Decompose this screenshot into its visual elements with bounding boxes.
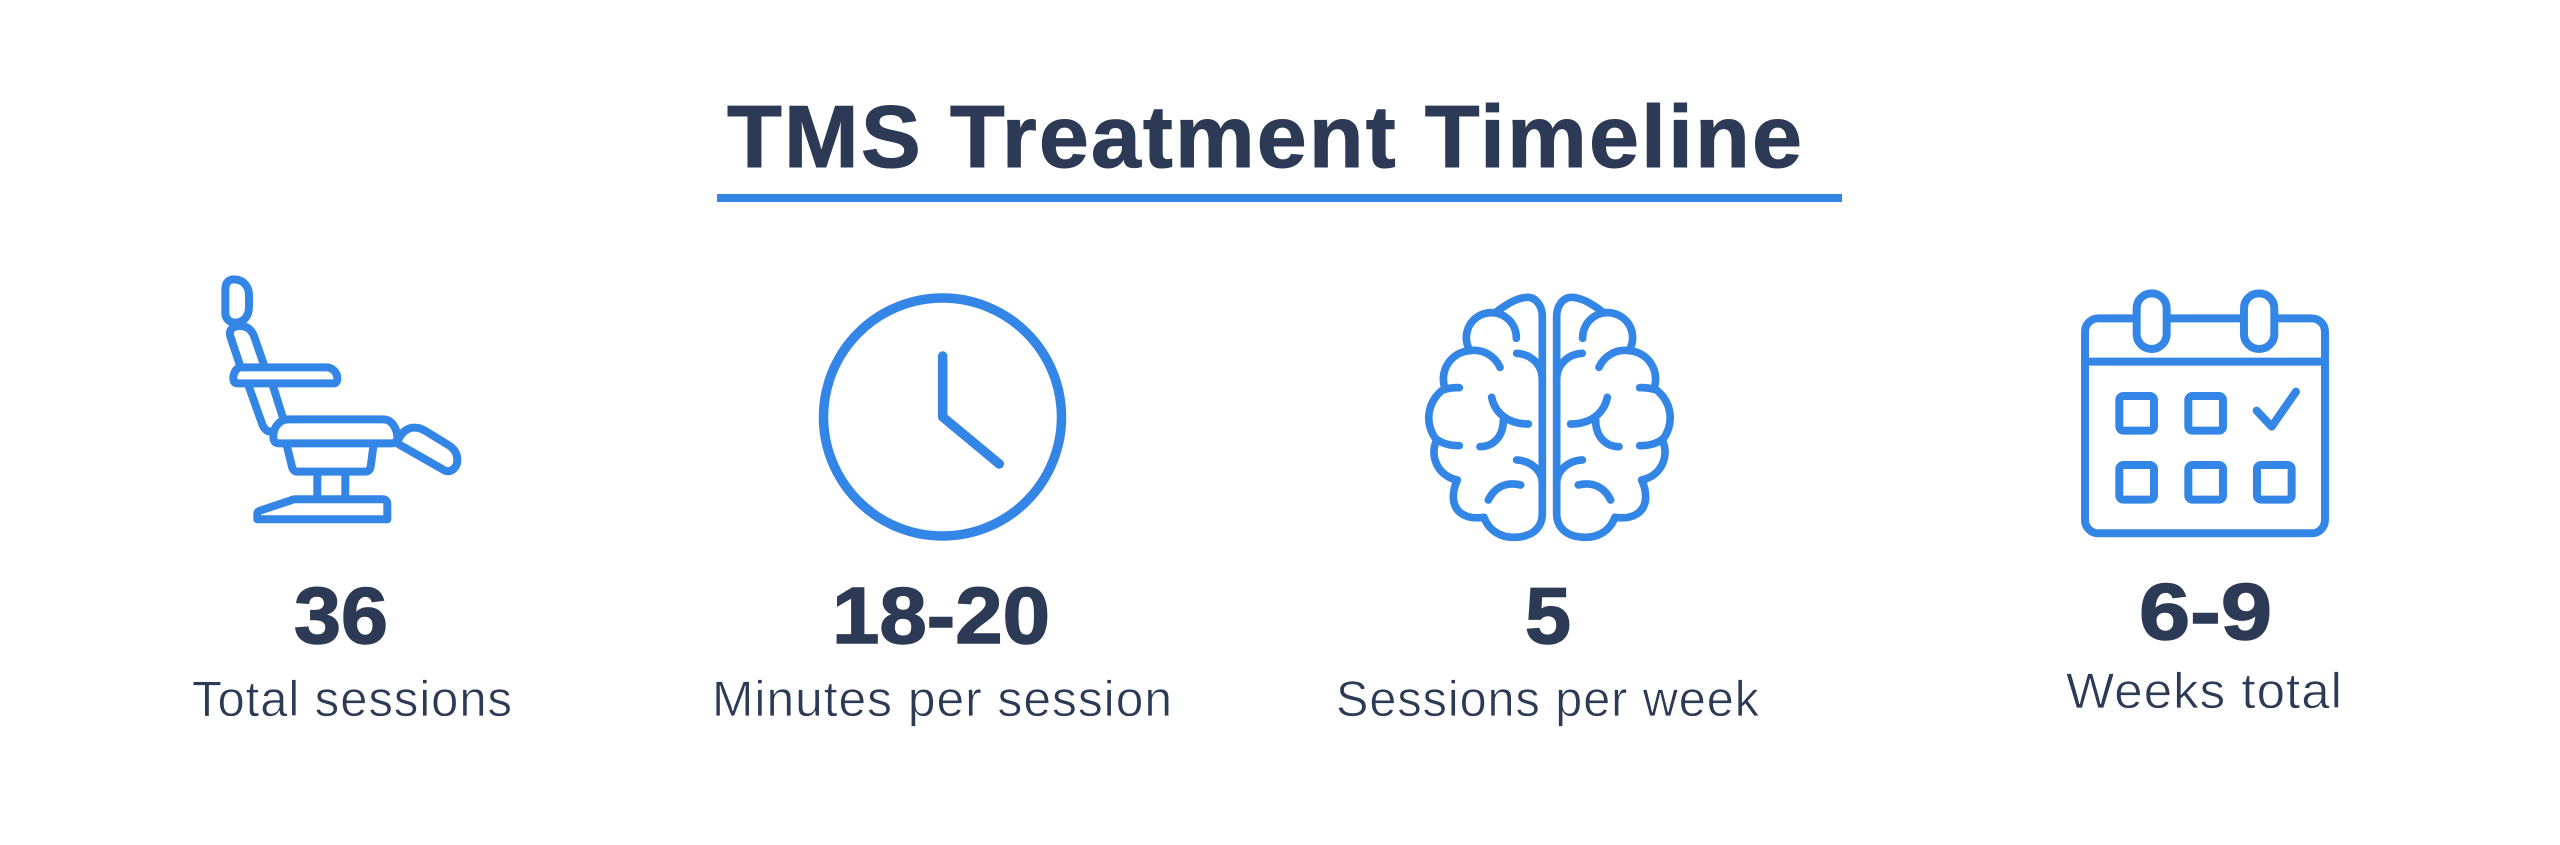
number: 5: 5 xyxy=(1525,571,1571,660)
panel: weeks total xyxy=(2066,293,2343,719)
panel: minutes per session xyxy=(712,298,1173,727)
number: 36: 36 xyxy=(294,571,388,660)
title: TMS Treatment Timeline xyxy=(727,87,1804,186)
label: weeks total: Weeks total xyxy=(2066,663,2343,719)
number: 6-9: 6-9 xyxy=(2139,567,2272,656)
label: total sessions: Total sessions xyxy=(192,671,513,727)
icon: calendar xyxy=(2085,293,2325,533)
icon: brain xyxy=(1429,297,1670,537)
panel: sessions per week xyxy=(1336,297,1760,727)
icon: clock xyxy=(824,298,1062,536)
icon: treatment chair xyxy=(225,279,457,519)
label: sessions per week: Sessions per week xyxy=(1336,671,1760,727)
label: minutes per session: Minutes per session xyxy=(712,671,1173,727)
panel: total sessions xyxy=(192,279,513,727)
number: 18-20: 18-20 xyxy=(832,571,1050,660)
